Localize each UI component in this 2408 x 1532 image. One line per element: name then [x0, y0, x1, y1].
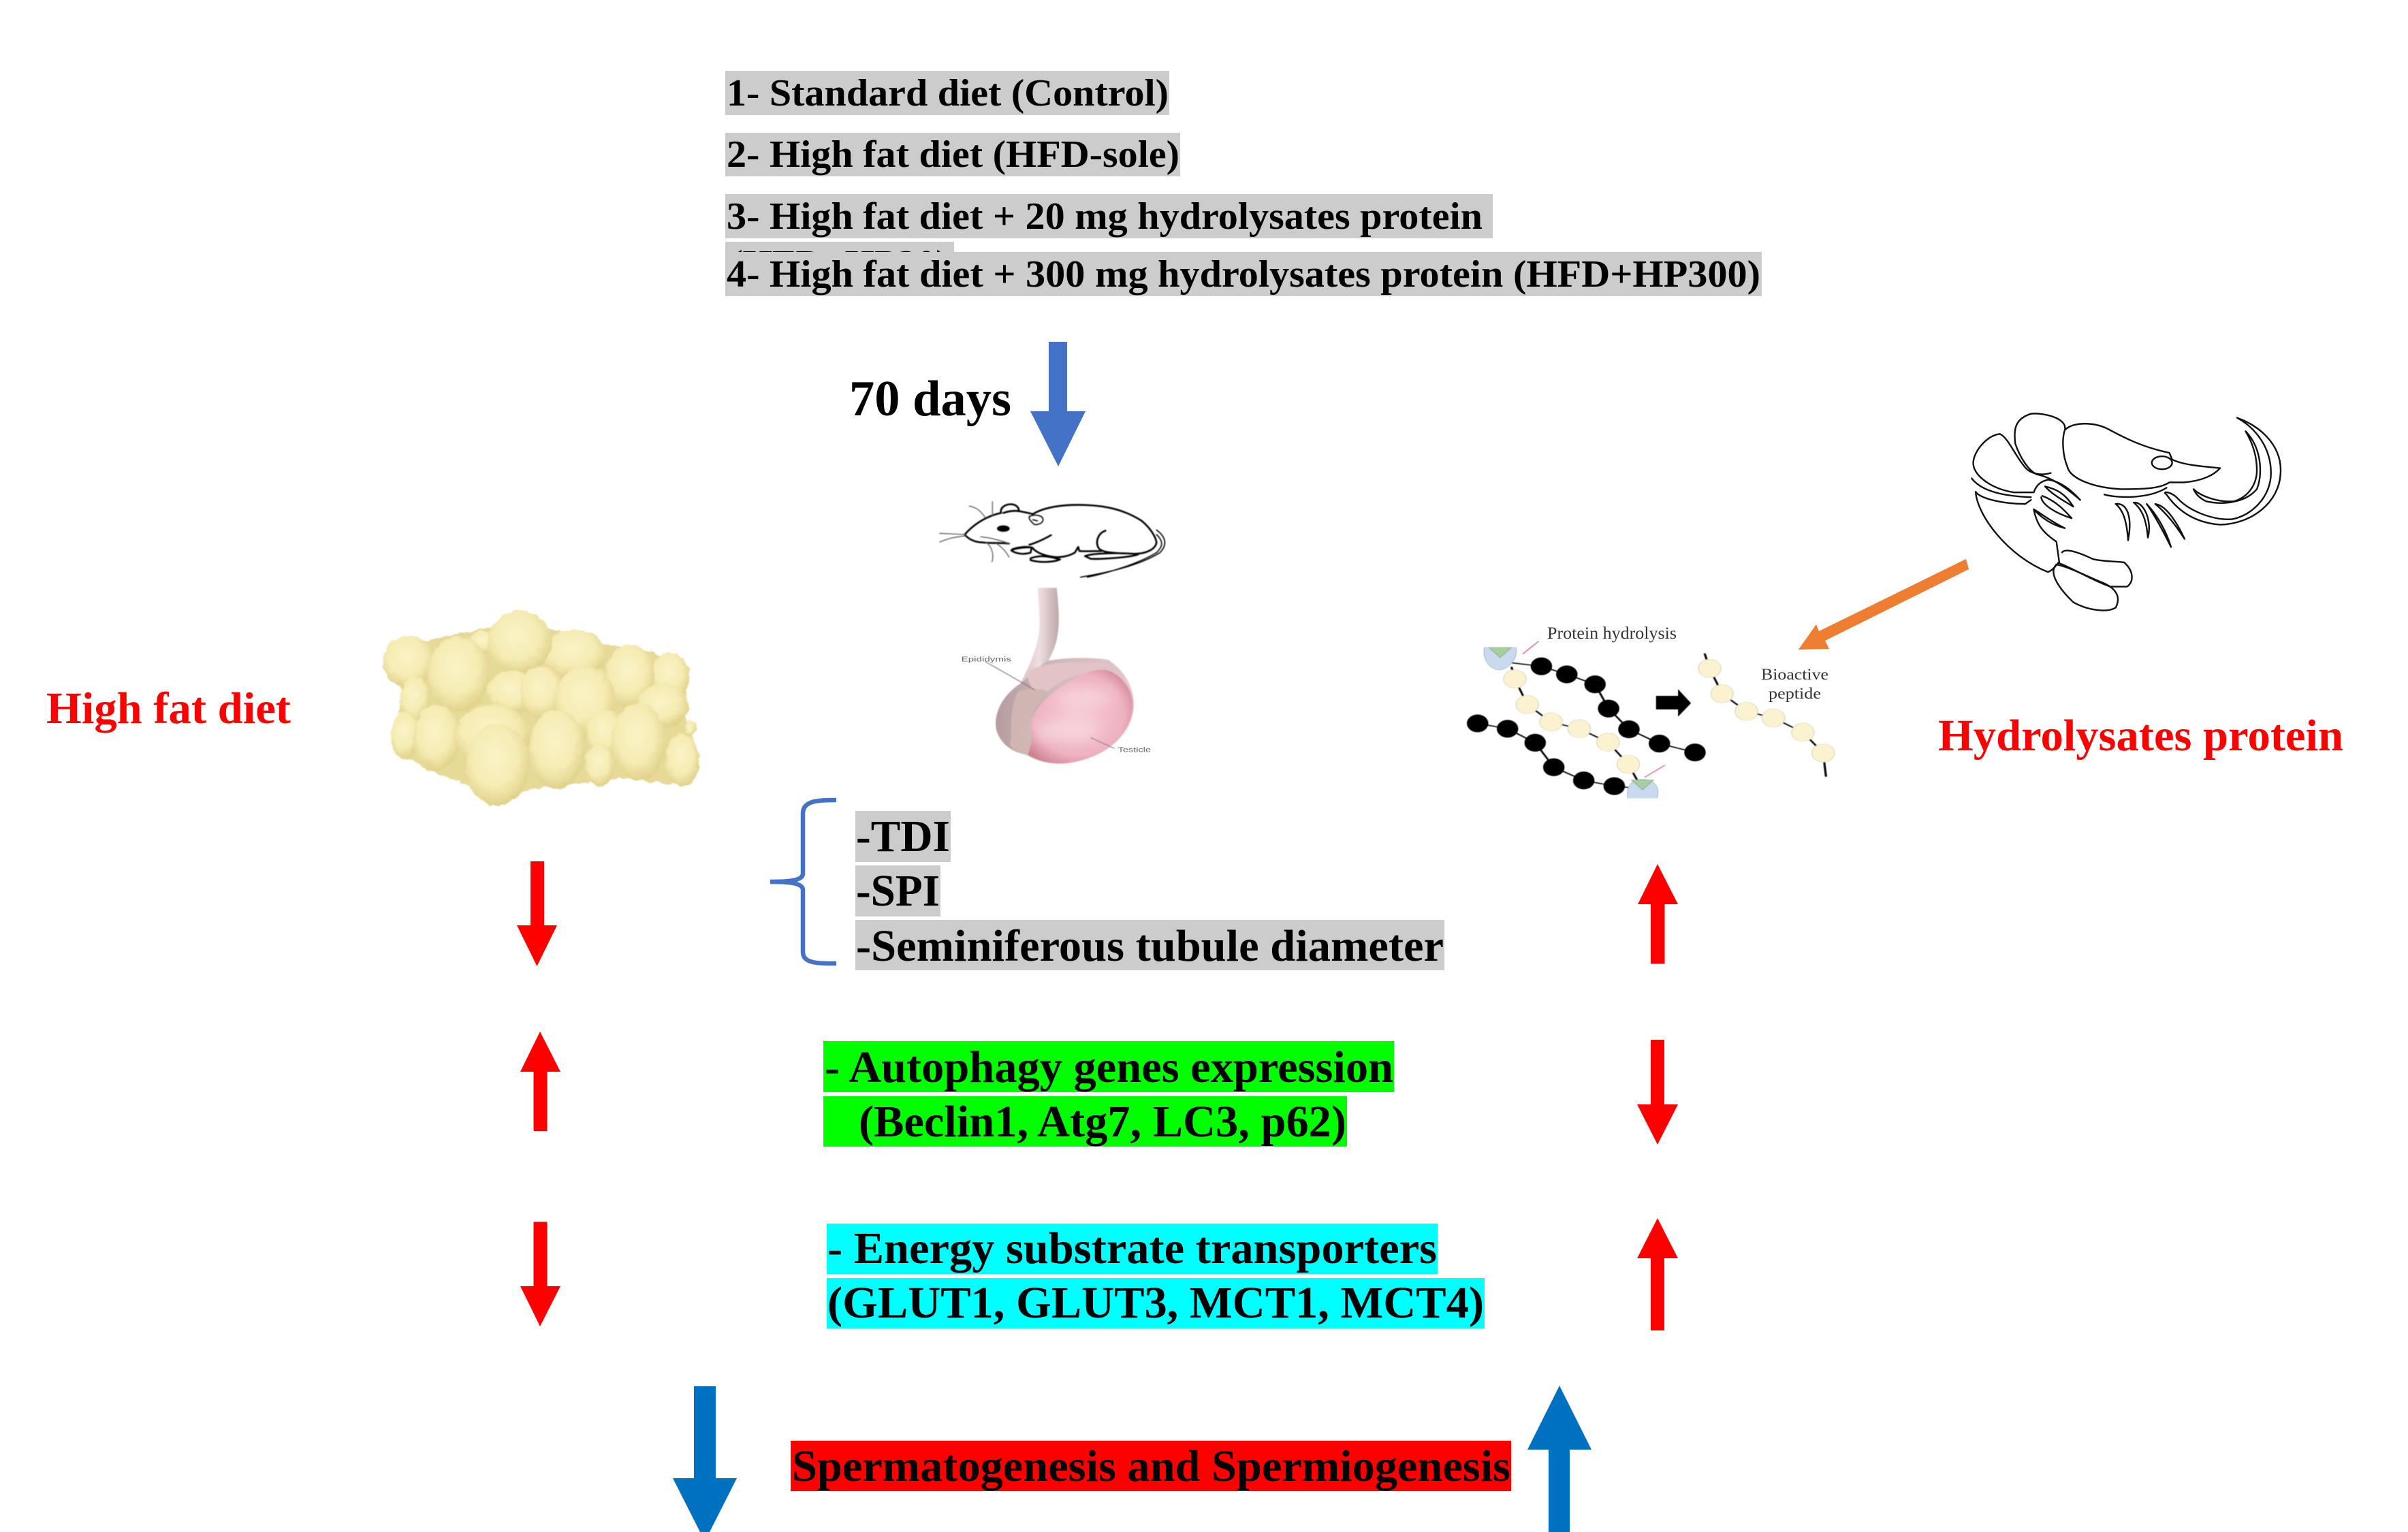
label: testicle: Testicle: [1118, 746, 1152, 754]
spermatogenesis label: Spermatogenesis and Spermiogenesis: [792, 1441, 1510, 1491]
label: high fat diet: High fat diet: [46, 684, 291, 733]
testis body: [985, 588, 1134, 763]
arrow: HFD decreases testis measures: [517, 861, 557, 966]
energy transporters block: [827, 1224, 1485, 1328]
autophagy heading: - Autophagy genes expression: [825, 1042, 1393, 1092]
measure: SPI: -SPI: [856, 866, 940, 916]
peptide chains: [1467, 641, 1835, 798]
label: peptide: peptide: [1769, 685, 1821, 702]
brace: testis measures: [770, 800, 836, 963]
group 1: standard diet: 1- Standard diet (Control): [727, 72, 1169, 114]
duration label: 70 days: [849, 371, 1011, 427]
arrow: HP increases spermatogenesis: [1527, 1386, 1591, 1532]
measure: seminiferous tubule diameter: -Seminiferous tubule diameter: [856, 921, 1444, 971]
arrow: HFD increases autophagy: [520, 1032, 560, 1131]
group 3 overflow line, mostly hidden: (HFD+HP20): [730, 243, 949, 285]
energy heading: - Energy substrate transporters: [827, 1224, 1437, 1273]
arrow: HP decreases autophagy: [1637, 1040, 1678, 1145]
measure: TDI: -TDI: [856, 812, 950, 861]
icon: testis diagram: [962, 588, 1152, 763]
arrow: HP increases testis measures: [1638, 864, 1678, 964]
label: hydrolysates protein: Hydrolysates protein: [1938, 711, 2343, 761]
group 3: high fat diet plus 20 mg: 3- High fat diet + 20 mg hydrolysates protein: [727, 195, 1483, 238]
arrow: HP increases transporters: [1637, 1218, 1678, 1330]
group 4: high fat diet plus 300 mg: 4- High fat diet + 300 mg hydrolysates protein (HFD+HP300): [727, 253, 1760, 296]
label: protein hydrolysis: Protein hydrolysis: [1547, 624, 1677, 643]
diagram: protein hydrolysis: [1467, 624, 1835, 798]
group 2: high fat diet: 2- High fat diet (HFD-sole): [727, 133, 1179, 176]
testis measures list: [855, 811, 1444, 971]
icon: shrimp outline: [1971, 413, 2281, 610]
autophagy gene names: (Beclin1, Atg7, LC3, p62): [859, 1097, 1346, 1147]
label: epididymis: Epididymis: [962, 656, 1011, 664]
arrow: HFD decreases spermatogenesis: [673, 1386, 737, 1532]
diet groups list: [725, 71, 1762, 296]
arrow: shrimp to peptide: [1799, 559, 1969, 650]
image: fat pieces: [383, 611, 699, 805]
icon: rat: [940, 502, 1165, 577]
label: bioactive: Bioactive: [1761, 666, 1828, 683]
transporter names: (GLUT1, GLUT3, MCT1, MCT4): [827, 1278, 1484, 1328]
arrow: duration down: [1030, 342, 1086, 466]
arrow: HFD decreases transporters: [520, 1222, 560, 1326]
autophagy genes block: [823, 1041, 1394, 1147]
